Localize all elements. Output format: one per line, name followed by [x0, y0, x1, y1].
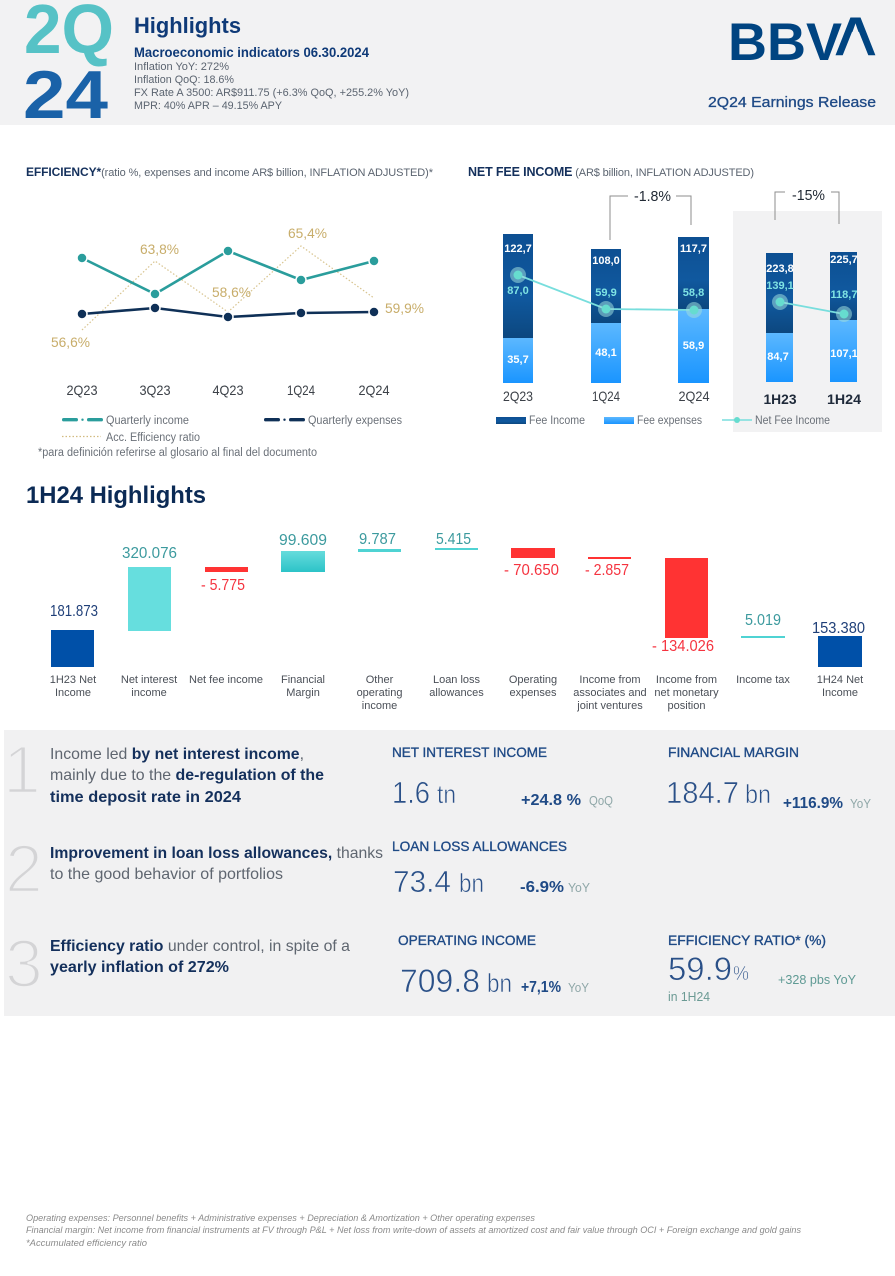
waterfall category labels: 1H24 Net	[817, 674, 863, 686]
net fee legend	[496, 415, 830, 427]
takeaway 2: 2	[5, 831, 43, 907]
bracket: -15%	[775, 188, 839, 224]
bar value labels	[504, 243, 858, 366]
bar value labels: 139,1	[766, 280, 794, 292]
takeaway 3	[5, 926, 350, 1002]
bar axis labels: 1H23	[764, 391, 797, 407]
KPI: loan loss allowances: 73.4	[393, 864, 451, 899]
waterfall category labels: Other	[366, 674, 394, 686]
efficiency ratio dotted line	[82, 246, 374, 330]
efficiency axis labels: 1Q24	[287, 382, 315, 398]
waterfall category labels: income	[131, 687, 167, 699]
KPI: loan loss allowances: YoY	[568, 880, 590, 895]
KPI: operating income	[398, 932, 589, 999]
header title: Highlights	[134, 13, 241, 38]
panel: efficiency chart	[26, 165, 434, 459]
panel: net fee income chart	[468, 165, 882, 432]
takeaway 2: Improvement in loan loss allowances, thanks	[50, 845, 383, 862]
bar axis labels: 1Q24	[592, 388, 620, 404]
period label 24: 24	[23, 57, 108, 133]
KPI: operating income: bn	[487, 968, 512, 998]
takeaway 1: 1	[3, 732, 41, 808]
waterfall values: 320.076	[122, 545, 177, 562]
bar value labels: 59,9	[595, 287, 617, 299]
net fee income heading: NET FEE INCOME (AR$ billion, INFLATION ADJUSTED)	[468, 165, 754, 179]
macroeconomic indicators: MPR: 40% APR – 49.15% APY	[134, 100, 283, 112]
bar value labels: 117,7	[680, 243, 707, 255]
bar axis labels: 2Q23	[503, 388, 533, 404]
efficiency axis labels: 4Q23	[212, 382, 244, 398]
waterfall values: - 2.857	[585, 562, 629, 579]
waterfall bars	[51, 548, 862, 667]
efficiency heading: EFFICIENCY*(ratio %, expenses and income AR$ billion, INFLATION ADJUSTED)*	[26, 165, 434, 179]
BBVA logo: A	[834, 5, 877, 67]
KPI: efficiency ratio: EFFICIENCY RATIO* (%)	[668, 932, 826, 948]
takeaway 1	[3, 732, 324, 808]
KPI: operating income: YoY	[568, 980, 589, 995]
waterfall category labels: Income from	[656, 674, 717, 686]
waterfall values	[50, 531, 865, 655]
KPI: net interest income: 1.6	[392, 775, 430, 810]
efficiency legend: Quarterly expenses	[308, 415, 402, 427]
footnotes	[26, 1213, 801, 1248]
bar value labels: 118,7	[831, 289, 857, 301]
waterfall category labels	[50, 674, 863, 712]
BBVA logo	[728, 5, 877, 72]
header band	[0, 0, 895, 133]
macroeconomic indicators: Inflation YoY: 272%	[134, 61, 229, 73]
takeaway 2	[5, 831, 383, 907]
bar value labels: 87,0	[507, 285, 529, 297]
waterfall category labels: Net fee income	[189, 674, 263, 686]
KPI: financial margin: FINANCIAL MARGIN	[668, 744, 799, 760]
waterfall category labels: allowances	[429, 687, 484, 699]
bar value labels: 58,8	[683, 287, 704, 299]
efficiency value labels	[51, 225, 424, 350]
KPI: operating income: OPERATING INCOME	[398, 932, 536, 948]
KPI: efficiency ratio: %	[733, 963, 749, 985]
waterfall category labels: Income tax	[736, 674, 790, 686]
KPI: loan loss allowances	[392, 838, 590, 899]
efficiency legend: Acc. Efficiency ratio	[106, 432, 200, 444]
macroeconomic indicators	[134, 44, 409, 112]
efficiency legend: *para definición referirse al glosario al final del documento	[38, 447, 317, 459]
waterfall category labels: Operating	[509, 674, 557, 686]
KPI: efficiency ratio: in 1H24	[668, 989, 710, 1004]
waterfall category labels: 1H23 Net	[50, 674, 96, 686]
bracket: -1.8%: -1.8%	[634, 189, 671, 205]
bar value labels: 108,0	[592, 255, 620, 267]
half-year background	[733, 211, 882, 432]
net fee income line	[510, 267, 852, 322]
efficiency value labels: 58,6%	[212, 284, 251, 300]
KPI: loan loss allowances: bn	[459, 868, 484, 898]
waterfall category labels: associates and	[573, 687, 647, 699]
waterfall category labels: operating	[357, 687, 402, 699]
KPI: loan loss allowances: LOAN LOSS ALLOWANCES	[392, 838, 567, 854]
efficiency legend	[38, 415, 402, 459]
takeaway 1: mainly due to the de-regulation of the	[50, 767, 324, 784]
footnotes: Financial margin: Net income from financial instruments at FV through P&L + Net loss from write-down of assets at amortized cost and fair value through OCI + Foreign exchange and gold gains	[26, 1225, 801, 1235]
waterfall category labels: Loan loss	[433, 674, 481, 686]
bar value labels: 223,8	[766, 263, 794, 275]
takeaway 3: 3	[5, 926, 43, 1002]
waterfall category labels: income	[362, 700, 397, 712]
bar value labels: 225,7	[830, 254, 858, 266]
KPI: operating income: 709.8	[400, 963, 480, 999]
efficiency axis labels: 2Q24	[358, 382, 390, 398]
bracket: -15%: -15%	[792, 188, 825, 204]
KPI: net interest income: QoQ	[589, 793, 613, 808]
KPI: operating income: +7,1%	[521, 979, 561, 996]
waterfall values: 9.787	[359, 531, 396, 548]
KPI: efficiency ratio	[668, 932, 856, 1004]
quarterly income line	[77, 246, 379, 299]
bar axis labels: 1H24	[827, 391, 861, 407]
waterfall category labels: position	[668, 700, 705, 712]
KPI: efficiency ratio: +328 pbs YoY	[778, 972, 856, 987]
BBVA logo: BBV	[728, 13, 842, 72]
waterfall category labels: Net interest	[121, 674, 177, 686]
efficiency value labels: 56,6%	[51, 334, 90, 350]
macroeconomic indicators: Inflation QoQ: 18.6%	[134, 74, 234, 86]
takeaway 3: yearly inflation of 272%	[50, 959, 229, 976]
takeaway 3: Efficiency ratio under control, in spite of a	[50, 938, 350, 955]
takeaway 1: Income led by net interest income,	[50, 746, 304, 763]
waterfall values: 5.415	[436, 531, 471, 548]
efficiency legend: Quarterly income	[106, 415, 189, 427]
stacked bars	[503, 234, 857, 383]
waterfall category labels: joint ventures	[576, 700, 643, 712]
KPI: net interest income: NET INTEREST INCOME	[392, 744, 547, 760]
section title: 1H24 Highlights	[26, 482, 206, 509]
waterfall values: - 5.775	[201, 577, 245, 594]
waterfall values: 99.609	[279, 532, 327, 549]
bar value labels: 107,1	[830, 348, 858, 360]
bar value labels: 35,7	[507, 354, 529, 366]
macroeconomic indicators: Macroeconomic indicators 06.30.2024	[134, 44, 369, 60]
KPI: financial margin: YoY	[850, 796, 871, 811]
bar value labels: 58,9	[683, 340, 704, 352]
KPI: net interest income: +24.8 %	[521, 792, 581, 809]
KPI: net interest income: tn	[437, 779, 456, 809]
efficiency axis labels	[66, 382, 390, 398]
waterfall category labels: Financial	[281, 674, 325, 686]
waterfall values: - 134.026	[652, 638, 714, 655]
waterfall category labels: Income from	[579, 674, 641, 686]
waterfall values: - 70.650	[504, 562, 559, 579]
bar value labels: 48,1	[595, 347, 617, 359]
efficiency value labels: 65,4%	[288, 225, 327, 241]
macroeconomic indicators: FX Rate A 3500: AR$911.75 (+6.3% QoQ, +255.2% YoY)	[134, 87, 409, 99]
waterfall values: 5.019	[745, 612, 781, 629]
waterfall values: 153.380	[812, 620, 865, 637]
waterfall chart	[50, 531, 865, 712]
bracket: -1.8%	[610, 189, 691, 240]
waterfall category labels: Margin	[286, 687, 320, 699]
efficiency value labels: 59,9%	[385, 300, 424, 316]
panel: key takeaways	[3, 730, 895, 1016]
waterfall category labels: expenses	[509, 687, 557, 699]
KPI: financial margin	[666, 744, 871, 812]
efficiency value labels: 63,8%	[140, 241, 179, 257]
KPI: financial margin: 184.7	[666, 775, 739, 810]
KPI: net interest income	[392, 744, 613, 810]
waterfall values: 181.873	[50, 603, 98, 620]
efficiency axis labels: 3Q23	[140, 382, 171, 398]
bar value labels: 84,7	[767, 351, 789, 363]
efficiency axis labels: 2Q23	[66, 382, 98, 398]
KPI: efficiency ratio: 59.9	[668, 951, 732, 987]
KPI: loan loss allowances: -6.9%	[520, 879, 564, 896]
bar value labels: 122,7	[504, 243, 532, 255]
footnotes: *Accumulated efficiency ratio	[26, 1238, 147, 1248]
net fee legend: Fee expenses	[637, 415, 702, 427]
footnotes: Operating expenses: Personnel benefits + Administrative expenses + Depreciation & Amortization + Other operating expenses	[26, 1213, 535, 1223]
KPI: financial margin: bn	[745, 779, 771, 809]
waterfall category labels: Income	[822, 687, 858, 699]
waterfall category labels: Income	[55, 687, 91, 699]
bar axis labels	[503, 388, 861, 407]
KPI: financial margin: +116.9%	[783, 795, 843, 812]
takeaway 1: time deposit rate in 2024	[50, 789, 241, 806]
quarterly expenses line	[77, 303, 379, 322]
takeaway 2: to the good behavior of portfolios	[50, 866, 283, 883]
bar axis labels: 2Q24	[678, 388, 710, 404]
net fee legend: Net Fee Income	[755, 415, 830, 427]
release label: 2Q24 Earnings Release	[708, 94, 876, 111]
net fee legend: Fee Income	[529, 415, 585, 427]
waterfall category labels: net monetary	[654, 687, 719, 699]
